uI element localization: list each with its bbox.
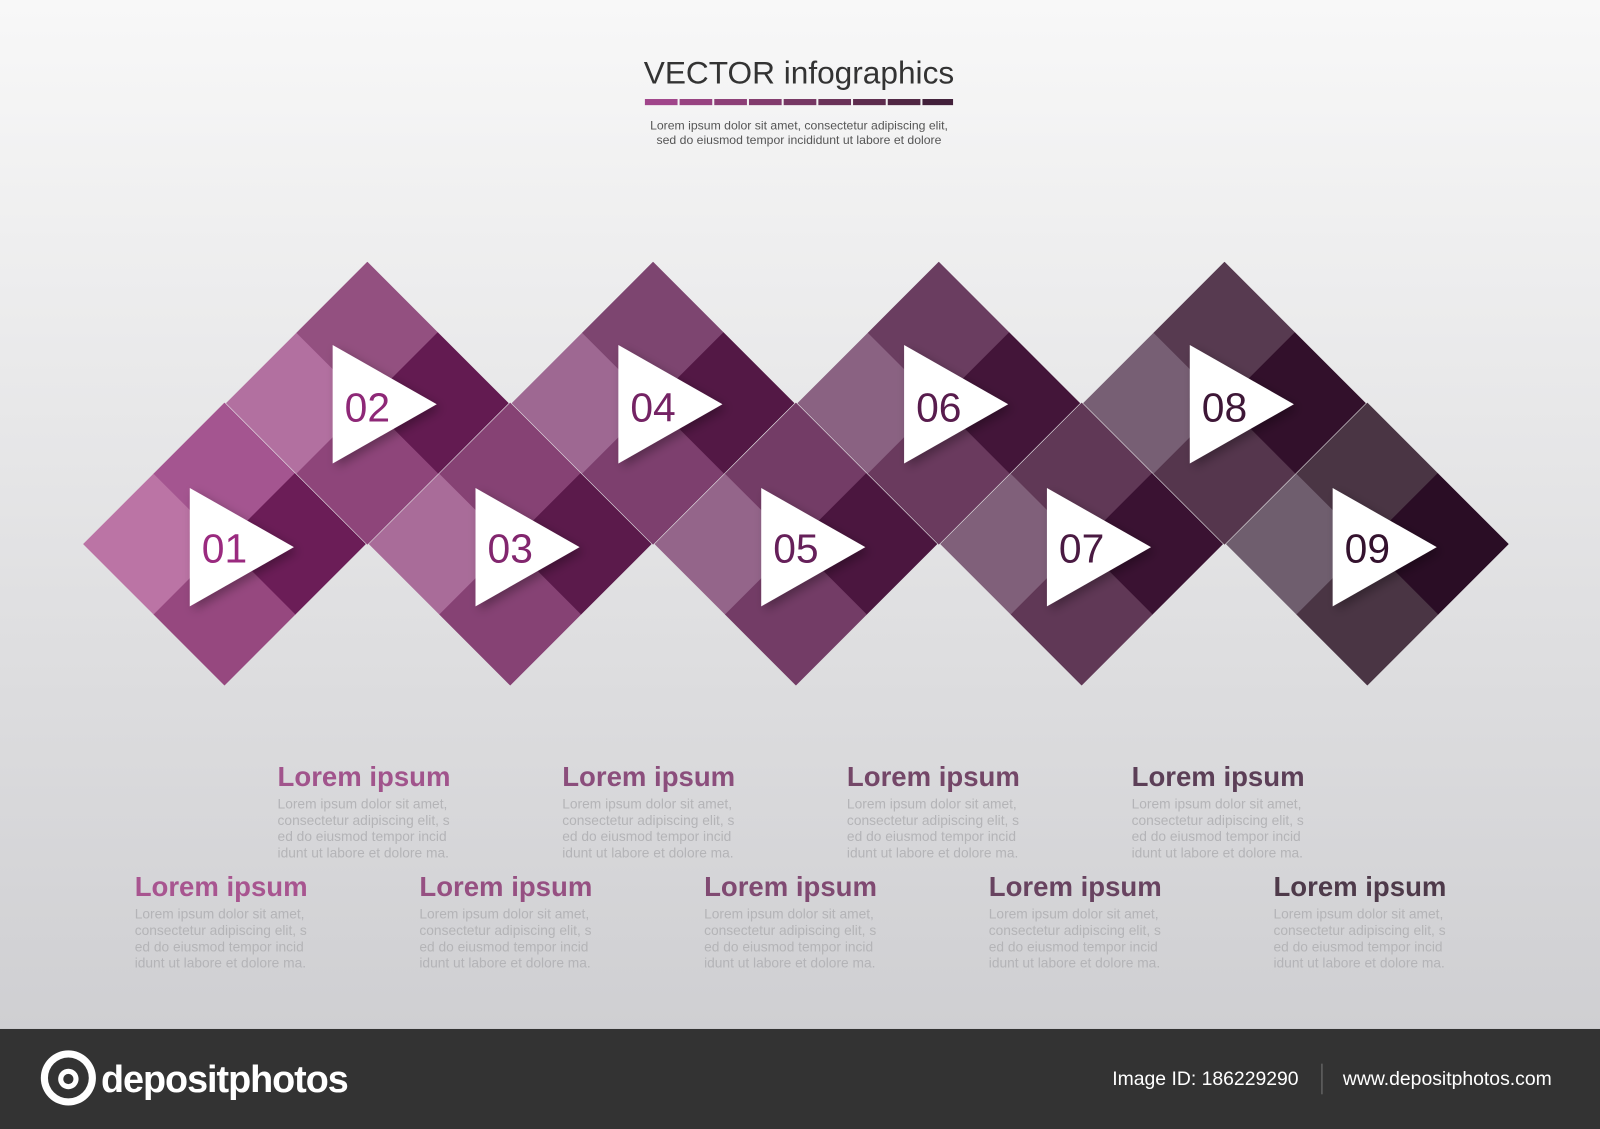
step 07 xyxy=(941,403,1222,685)
text block 08: idunt ut labore et dolore ma. xyxy=(1132,845,1303,860)
website: www.depositphotos.com xyxy=(1342,1068,1552,1090)
text block 09: consectetur adipiscing elit, s xyxy=(1273,923,1446,938)
step 05: 05 xyxy=(773,525,819,571)
text block 03: ed do eiusmod tempor incid xyxy=(419,939,588,954)
step 01: 01 xyxy=(202,525,247,571)
subtitle: Lorem ipsum dolor sit amet, consectetur adipiscing elit, xyxy=(650,119,948,133)
text block 06: Lorem ipsum dolor sit amet, xyxy=(847,796,1017,811)
text block 01: Lorem ipsum xyxy=(135,871,308,902)
text block 04: idunt ut labore et dolore ma. xyxy=(562,845,734,860)
step 03: 03 xyxy=(488,525,533,571)
text blocks xyxy=(135,761,1446,971)
diamond chain xyxy=(84,262,1508,685)
footer bar xyxy=(0,1029,1600,1129)
step 06: 06 xyxy=(916,385,961,431)
text block 02 xyxy=(278,761,450,860)
text block 03: idunt ut labore et dolore ma. xyxy=(419,956,591,971)
text block 01 xyxy=(135,871,308,971)
text block 01: Lorem ipsum dolor sit amet, xyxy=(135,907,305,922)
text block 02: idunt ut labore et dolore ma. xyxy=(278,845,449,860)
step 02 xyxy=(227,262,508,544)
subtitle: sed do eiusmod tempor incididunt ut labore et dolore xyxy=(657,133,942,147)
text block 01: ed do eiusmod tempor incid xyxy=(135,939,304,954)
step 05 xyxy=(655,403,937,685)
step 02: 02 xyxy=(345,385,390,431)
text block 06 xyxy=(847,761,1020,860)
text block 02: Lorem ipsum xyxy=(278,761,450,792)
title color bar xyxy=(645,99,953,105)
text block 01: idunt ut labore et dolore ma. xyxy=(135,956,306,971)
text block 01: consectetur adipiscing elit, s xyxy=(135,923,307,938)
text block 04: consectetur adipiscing elit, s xyxy=(562,813,734,828)
text block 09: Lorem ipsum xyxy=(1273,871,1446,902)
text block 05: idunt ut labore et dolore ma. xyxy=(704,956,875,971)
text block 03: Lorem ipsum xyxy=(419,871,592,902)
text block 06: ed do eiusmod tempor incid xyxy=(847,829,1016,844)
logo text: depositphotos xyxy=(101,1059,348,1101)
text block 05: Lorem ipsum xyxy=(704,871,877,902)
text block 05: Lorem ipsum dolor sit amet, xyxy=(704,907,874,922)
step 08 xyxy=(1084,262,1365,544)
text block 06: Lorem ipsum xyxy=(847,761,1020,792)
text block 07: ed do eiusmod tempor incid xyxy=(989,939,1158,954)
text block 05 xyxy=(704,871,877,971)
image id: Image ID: 186229290 xyxy=(1112,1068,1299,1090)
text block 07: idunt ut labore et dolore ma. xyxy=(989,956,1160,971)
text block 07: Lorem ipsum xyxy=(989,871,1162,902)
step 08: 08 xyxy=(1202,385,1247,431)
text block 03 xyxy=(419,871,592,971)
text block 09: Lorem ipsum dolor sit amet, xyxy=(1273,907,1443,922)
title: VECTOR infographics xyxy=(644,55,954,91)
step 06 xyxy=(798,262,1080,544)
text block 02: ed do eiusmod tempor incid xyxy=(278,829,447,844)
text block 04 xyxy=(562,761,735,860)
step 01 xyxy=(84,403,365,685)
text block 09: ed do eiusmod tempor incid xyxy=(1273,939,1443,954)
step 09: 09 xyxy=(1345,525,1390,571)
text block 02: consectetur adipiscing elit, s xyxy=(278,813,450,828)
step 04: 04 xyxy=(630,385,676,431)
text block 07: consectetur adipiscing elit, s xyxy=(989,923,1161,938)
text block 03: consectetur adipiscing elit, s xyxy=(419,923,592,938)
text block 05: consectetur adipiscing elit, s xyxy=(704,923,876,938)
text block 03: Lorem ipsum dolor sit amet, xyxy=(419,907,589,922)
text block 07: Lorem ipsum dolor sit amet, xyxy=(989,907,1159,922)
text block 04: Lorem ipsum xyxy=(562,761,735,792)
text block 08: Lorem ipsum dolor sit amet, xyxy=(1132,796,1301,811)
icon: camera logo xyxy=(41,1050,96,1106)
text block 06: idunt ut labore et dolore ma. xyxy=(847,845,1018,860)
text block 08: Lorem ipsum xyxy=(1132,761,1305,792)
text block 08: consectetur adipiscing elit, s xyxy=(1132,813,1304,828)
text block 05: ed do eiusmod tempor incid xyxy=(704,939,873,954)
text block 08: ed do eiusmod tempor incid xyxy=(1132,829,1301,844)
text block 04: ed do eiusmod tempor incid xyxy=(562,829,731,844)
step 04 xyxy=(512,262,794,544)
text block 09 xyxy=(1273,871,1446,971)
step 07: 07 xyxy=(1059,525,1104,571)
text block 06: consectetur adipiscing elit, s xyxy=(847,813,1019,828)
text block 02: Lorem ipsum dolor sit amet, xyxy=(278,796,447,811)
step 09 xyxy=(1227,403,1508,685)
text block 04: Lorem ipsum dolor sit amet, xyxy=(562,796,732,811)
text block 09: idunt ut labore et dolore ma. xyxy=(1273,956,1445,971)
text block 07 xyxy=(989,871,1162,971)
text block 08 xyxy=(1132,761,1305,860)
step 03 xyxy=(369,403,651,685)
